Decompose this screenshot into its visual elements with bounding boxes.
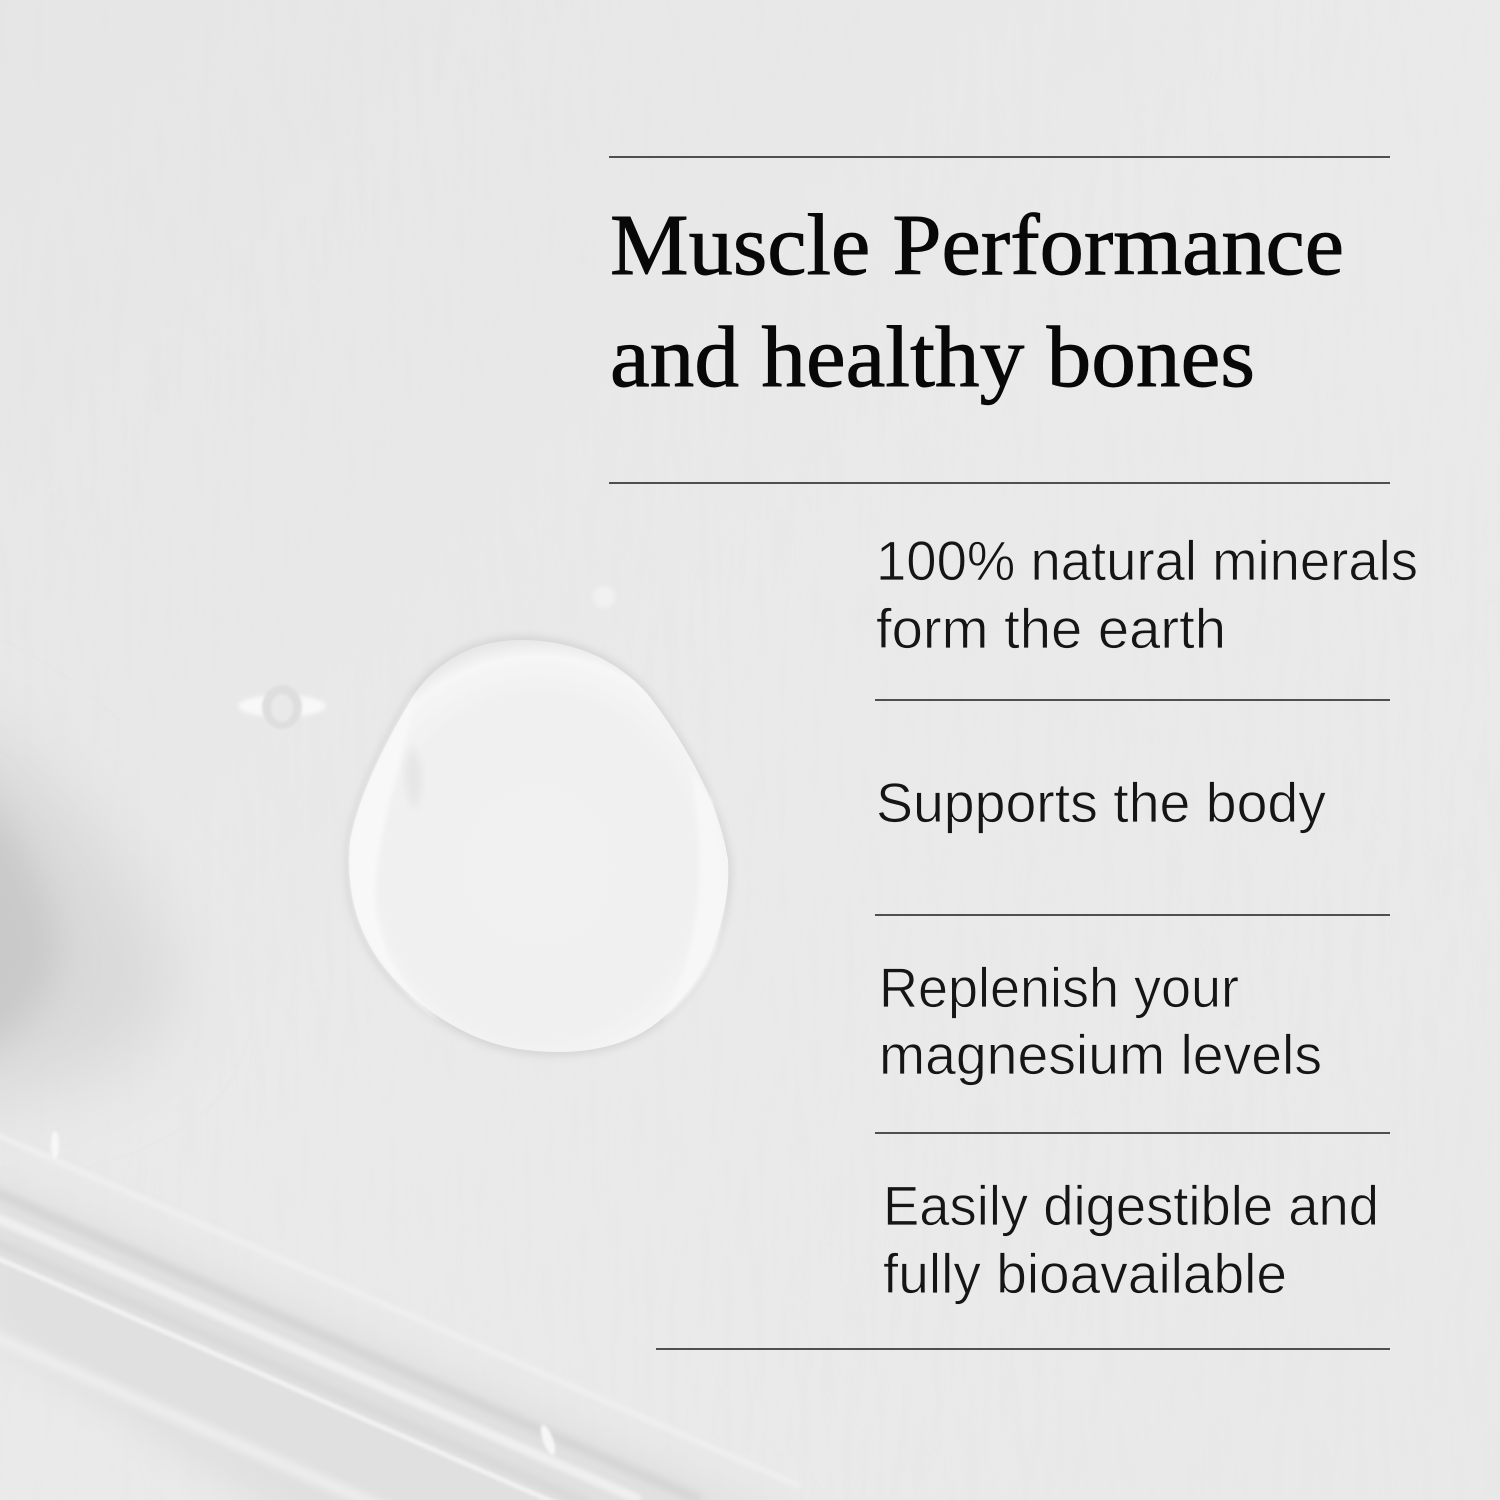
title bbox=[610, 196, 1344, 405]
benefit: magnesium levels: Replenish your bbox=[879, 956, 1239, 1019]
benefit: digestible and bioavailable: fully bioavailable bbox=[883, 1242, 1287, 1305]
benefit: supports the body: Supports the body bbox=[876, 771, 1326, 834]
benefit: natural minerals: form the earth bbox=[876, 597, 1226, 660]
title: Muscle Performance bbox=[610, 196, 1344, 293]
divider lines bbox=[609, 157, 1390, 1349]
benefit: digestible and bioavailable: Easily digestible and bbox=[883, 1174, 1379, 1237]
icon: tiny droplet top bbox=[593, 586, 615, 608]
benefit: magnesium levels: magnesium levels bbox=[879, 1023, 1322, 1086]
benefit: digestible and bioavailable bbox=[883, 1174, 1379, 1305]
icon: small droplet left bbox=[238, 685, 326, 729]
icon: large water drop bbox=[346, 636, 731, 1056]
title: and healthy bones bbox=[610, 308, 1255, 405]
benefit: magnesium levels bbox=[879, 956, 1322, 1086]
benefit: natural minerals: 100% natural minerals bbox=[876, 529, 1418, 592]
benefit: natural minerals bbox=[876, 529, 1418, 660]
diagonal glass streaks bbox=[0, 1131, 800, 1500]
